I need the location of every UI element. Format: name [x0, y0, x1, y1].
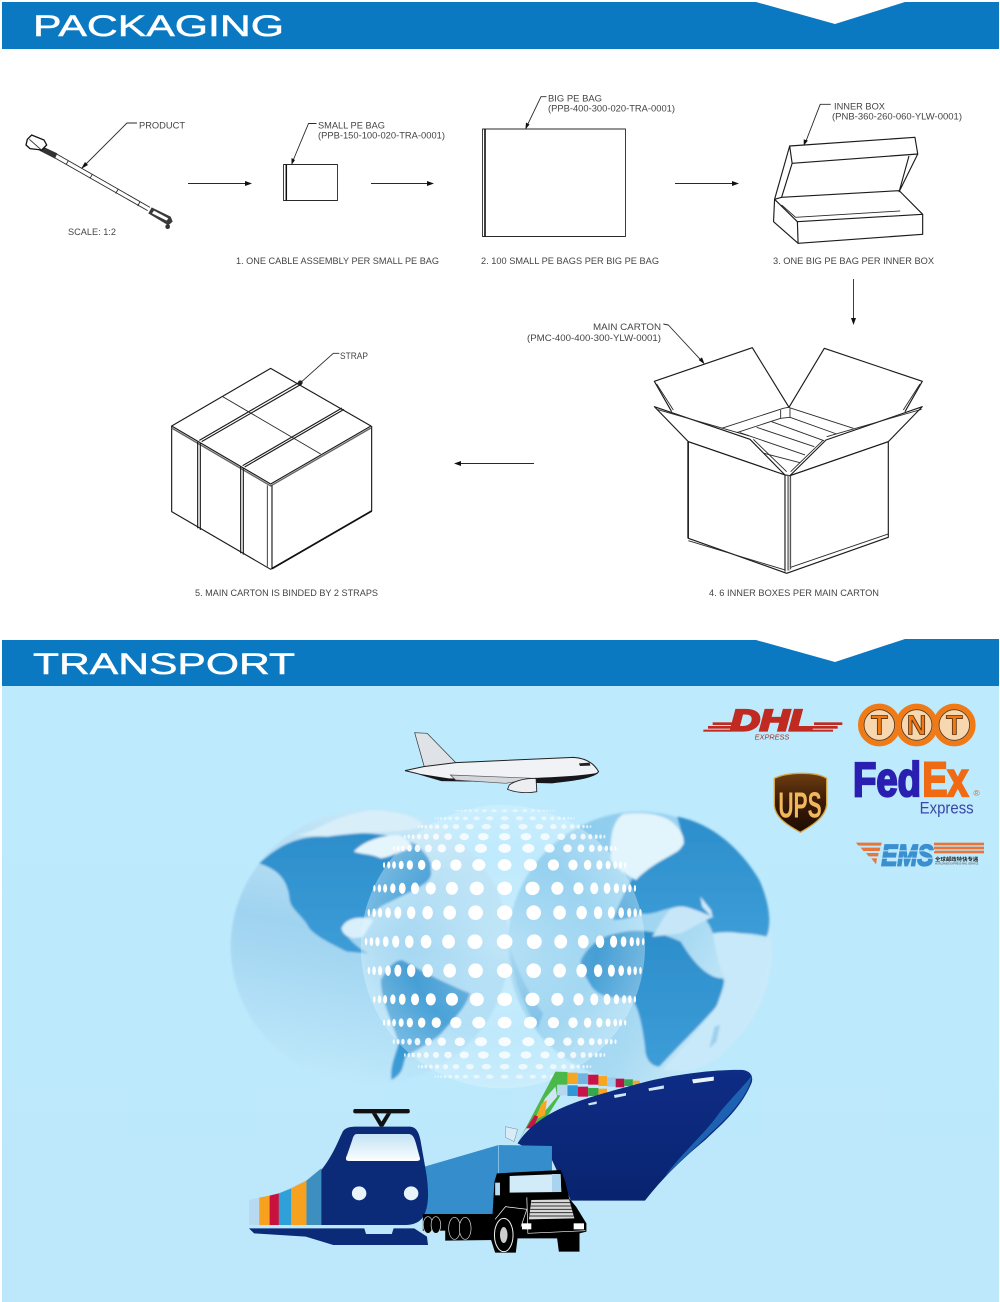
step 3: inner box: INNER BOX — [834, 102, 886, 112]
step: product cable assembly — [26, 121, 185, 238]
train — [249, 1109, 428, 1245]
step 3: inner box — [773, 102, 962, 267]
step 4: main carton — [527, 322, 922, 599]
logo: TNT — [861, 706, 973, 744]
arrow: small bag to big bag — [371, 181, 434, 186]
logo: DHL — [703, 704, 842, 741]
header: transport: TRANSPORT — [33, 648, 295, 681]
step 3: inner box: 3. ONE BIG PE BAG PER INNER BOX — [773, 256, 935, 267]
arrow: main carton to strapped carton — [454, 461, 534, 466]
ship, truck and train — [249, 1070, 752, 1253]
cable drawing — [26, 135, 173, 229]
logo: DHL: DHL — [731, 704, 814, 737]
step 1: small PE bag: SMALL PE BAG — [318, 121, 385, 132]
step 4: main carton: MAIN CARTON — [593, 322, 661, 333]
carrier logos — [703, 704, 984, 872]
transport background panel — [2, 686, 999, 1302]
arrow: product to small bag — [188, 181, 252, 186]
step 5: strapped carton: 5. MAIN CARTON IS BINDED BY 2 STRAPS — [195, 588, 378, 599]
logo: FedEx: Express — [920, 798, 974, 817]
step 5: strapped carton — [172, 351, 378, 599]
airplane — [405, 733, 599, 793]
step 4: main carton: 4. 6 INNER BOXES PER MAIN CARTON — [709, 588, 879, 599]
world globes illustration — [231, 805, 772, 1088]
logo: FedEx: ® — [973, 788, 980, 798]
logo: TNT: N — [907, 710, 927, 741]
logo: FedEx: Ex — [922, 753, 968, 807]
logo: EMS: WORLDWIDE EXPRESS MAIL SERVICE — [935, 862, 979, 865]
step 1: small PE bag: 1. ONE CABLE ASSEMBLY PER SMALL PE BAG — [236, 256, 439, 267]
step 2: big PE bag: BIG PE BAG — [548, 94, 602, 104]
logo: UPS — [774, 773, 827, 832]
header: packaging — [2, 2, 999, 49]
dotted sphere — [361, 805, 645, 1088]
step 2: big PE bag: (PPB-400-300-020-TRA-0001) — [548, 104, 675, 115]
step: product cable assembly: PRODUCT — [139, 121, 185, 132]
right globe: Europe, Africa, Asia — [507, 812, 772, 1082]
logo: TNT: T — [946, 710, 963, 741]
arrow: inner box to main carton — [851, 279, 856, 325]
step: product cable assembly: SCALE: 1:2 — [68, 227, 116, 238]
step 1: small PE bag: (PPB-150-100-020-TRA-0001) — [318, 131, 445, 142]
step 3: inner box: (PNB-360-260-060-YLW-0001) — [832, 112, 962, 122]
header: transport — [2, 639, 999, 686]
logo: DHL: EXPRESS — [755, 732, 789, 741]
step 4: main carton: (PMC-400-400-300-YLW-0001) — [527, 333, 661, 344]
logo: FedEx: Fed — [853, 753, 921, 807]
header: packaging: PACKAGING — [33, 10, 284, 43]
logo: EMS: 全球邮政特快专递 — [935, 856, 978, 863]
left globe: Americas — [231, 809, 509, 1084]
container ship — [505, 1070, 752, 1201]
logo: TNT: T — [871, 710, 888, 741]
logo: FedEx — [853, 753, 980, 817]
logo: UPS: UPS — [778, 785, 822, 826]
truck container — [425, 1145, 552, 1214]
logo: EMS: EMS — [881, 839, 934, 872]
step 5: strapped carton: STRAP — [340, 351, 368, 362]
logo: EMS — [856, 839, 984, 872]
truck — [423, 1170, 586, 1253]
arrow: big bag to inner box — [675, 181, 739, 186]
step 2: big PE bag — [481, 94, 675, 267]
step 1: small PE bag — [236, 121, 445, 267]
step 2: big PE bag: 2. 100 SMALL PE BAGS PER BIG PE BAG — [481, 256, 659, 267]
